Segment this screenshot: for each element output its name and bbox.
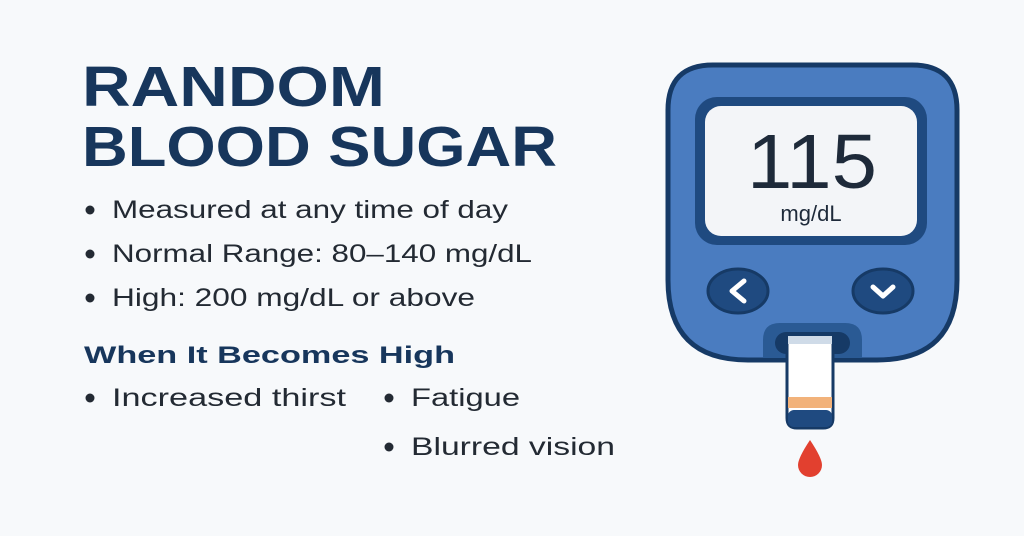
bullet list: facts <box>86 196 532 312</box>
title <box>82 55 557 179</box>
icon: blood drop <box>798 440 822 477</box>
screen: mg/dL <box>780 201 842 226</box>
symptoms list: Fatigue <box>411 384 520 412</box>
screen: 115 <box>747 119 877 205</box>
bullet list: facts: Measured at any time of day <box>112 196 509 224</box>
bullet list: facts: High: 200 mg/dL or above <box>112 284 475 312</box>
subheading: When It Becomes High <box>84 342 455 369</box>
title: RANDOM <box>82 55 385 119</box>
title: BLOOD SUGAR <box>82 115 557 179</box>
bullet list: facts: Normal Range: 80–140 mg/dL <box>112 240 532 268</box>
buttons <box>708 269 913 313</box>
strip slot <box>763 323 862 358</box>
symptoms list: Blurred vision <box>411 433 615 461</box>
symptoms list <box>86 384 615 461</box>
screen <box>695 97 927 245</box>
symptoms list: Increased thirst <box>112 384 346 412</box>
icon: test strip <box>787 335 833 428</box>
icon: glucose meter <box>668 65 957 360</box>
